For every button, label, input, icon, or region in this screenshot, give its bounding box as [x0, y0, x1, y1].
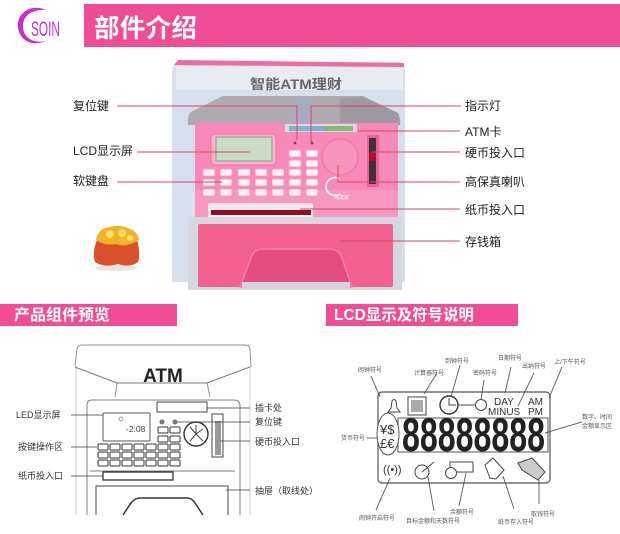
indicator lights: [294, 142, 313, 144]
machine name plate: 智能ATM理财: [250, 76, 342, 92]
banknote slot: [90, 471, 235, 480]
symbol labels: 闹钟符号: [358, 366, 382, 374]
callout labels: 指示灯: [465, 98, 501, 113]
line drawing leaders: [71, 408, 250, 490]
card slot with ATM card: [285, 124, 357, 132]
callout labels: 复位键: [73, 98, 109, 113]
keypad panel: [195, 123, 398, 218]
coin slot: [212, 414, 223, 457]
keypad: [98, 427, 180, 466]
line drawing labels: 复位键: [255, 416, 282, 427]
icon: balance: [446, 462, 473, 478]
icon: target amount: [415, 462, 434, 479]
speaker: [184, 422, 208, 446]
callout labels: [73, 98, 525, 249]
icon: alarm on: ((•)): [383, 464, 402, 476]
reset buttons: [160, 420, 178, 424]
symbol labels: 货币符号: [341, 434, 365, 442]
symbol labels: 密码符号: [473, 369, 497, 377]
DAY MINUS: MINUS: [488, 407, 521, 418]
symbol labels: 余额符号: [450, 508, 474, 516]
icon: bell: [388, 400, 400, 412]
line drawing labels: 纸币投入口: [18, 470, 63, 481]
small panel logo: 尚滨家: [334, 194, 349, 201]
banknote slot: [208, 203, 313, 218]
AM PM: AM: [528, 397, 543, 408]
symbol labels: 闹钟开启符号: [359, 514, 395, 522]
currency symbols: [377, 413, 399, 455]
callout labels: LCD显示屏: [73, 144, 133, 158]
icon: cash withdrawal: [518, 458, 545, 480]
cash drawer: [188, 217, 402, 290]
hood: [188, 96, 400, 125]
currency symbols: £€: [380, 436, 395, 451]
symbol labels: 计算器符号: [414, 369, 444, 377]
line drawing labels: 硬币投入口: [255, 436, 300, 447]
drawer: [96, 486, 228, 515]
symbol labels: 取钱符号: [531, 510, 555, 518]
digit display: 88888888: [402, 408, 545, 461]
line drawing labels: [16, 402, 318, 496]
symbol labels: 纸币存入符号: [498, 518, 534, 526]
line drawing labels: 抽屉（取线处）: [255, 485, 318, 496]
section heading: product preview: [0, 304, 177, 326]
icon: coin purse: [94, 226, 139, 271]
line drawing labels: LED显示屏: [16, 410, 61, 420]
icon: calculator: [408, 397, 426, 415]
AM PM: [528, 397, 543, 418]
line drawing labels: 按键操作区: [18, 441, 63, 452]
callout lines: [117, 106, 461, 241]
callout labels: 纸币投入口: [465, 202, 525, 217]
logo: SOIN: SOIN: [31, 18, 60, 41]
small panel logo: [326, 177, 349, 201]
callout labels: 软键盘: [73, 173, 109, 188]
callout labels: ATM卡: [465, 125, 501, 139]
soft keypad: [203, 150, 318, 196]
LED screen: -2:08: [126, 424, 146, 434]
icon: banknote deposit: [485, 458, 504, 479]
card slot: [157, 402, 207, 412]
speaker: [322, 139, 358, 175]
section heading: LCD symbols: LCD显示及符号说明: [334, 305, 474, 324]
DAY MINUS: [488, 397, 521, 418]
icon: clock: [440, 396, 458, 414]
symbol labels: 金额显示区: [582, 422, 612, 430]
symbol labels: 出纳符号: [522, 362, 546, 370]
line drawing: ATM front view: [75, 345, 251, 515]
AM PM: PM: [528, 407, 543, 418]
callout labels: 硬币投入口: [465, 145, 525, 160]
product photo: pink ATM piggy bank: [172, 60, 405, 290]
LCD screen: [211, 134, 276, 165]
LED screen: [103, 413, 150, 441]
ATM heading: ATM: [143, 366, 183, 387]
header banner: [84, 4, 620, 47]
symbol labels: 上/下午符号: [554, 358, 586, 366]
symbol labels: 目标金额和天数符号: [406, 517, 460, 525]
logo: SOIN: [18, 8, 60, 43]
symbol labels: 日期符号: [498, 354, 522, 362]
section heading: LCD symbols: [326, 304, 518, 326]
symbol labels: 数字、时间: [582, 413, 612, 421]
symbol leader lines: [367, 365, 582, 511]
callout labels: 存钱箱: [465, 234, 501, 249]
currency symbols: ¥$: [379, 422, 395, 437]
callout labels: 高保真喇叭: [465, 174, 525, 189]
line drawing labels: 插卡处: [255, 402, 282, 413]
DAY MINUS: DAY: [494, 397, 514, 408]
symbol labels: [341, 354, 612, 526]
LCD symbol diagram: [377, 392, 550, 483]
digit display: [398, 408, 548, 461]
title: 部件介绍: [94, 15, 197, 43]
coin slot: [367, 135, 379, 187]
icon: key: [458, 400, 486, 410]
symbol labels: 到钟符号: [445, 357, 469, 365]
section heading: product preview: 产品组件预览: [14, 305, 110, 324]
